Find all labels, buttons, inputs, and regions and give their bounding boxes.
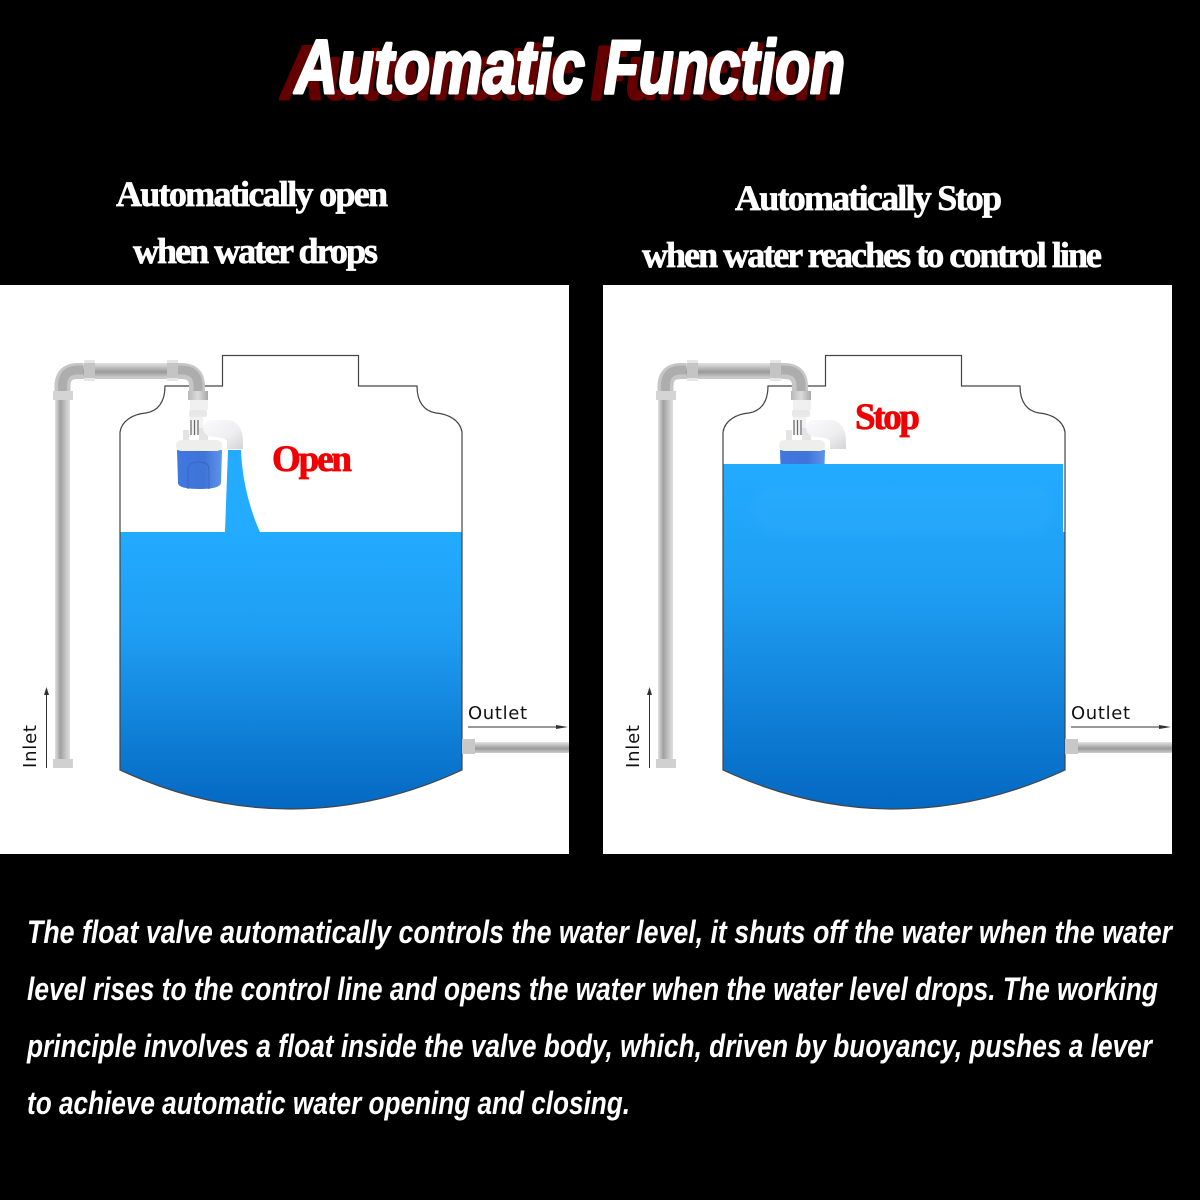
- float valve: [176, 400, 243, 489]
- water in tank: [723, 464, 1065, 809]
- inlet label: Inlet: [20, 725, 41, 768]
- panel: stop state: [603, 285, 1172, 854]
- outlet pipe: [462, 739, 569, 754]
- description text: to achieve automatic water opening and closing.: [27, 1085, 630, 1121]
- tank outline: [120, 356, 462, 809]
- heading: automatically open: Automatically open: [116, 174, 388, 214]
- water highlight patch: [753, 485, 1053, 535]
- title: Function: [591, 31, 831, 116]
- title: Function: [604, 25, 845, 110]
- heading: automatically open: [116, 174, 388, 271]
- water in tank: [120, 532, 462, 809]
- heading: automatically stop: when water reaches to control line: [642, 235, 1102, 275]
- inlet label: [20, 687, 49, 768]
- outlet label: Outlet: [468, 703, 527, 724]
- float valve: [779, 400, 846, 464]
- tank outline: [723, 356, 1065, 809]
- panel: open state: [0, 285, 569, 854]
- inlet pipe: [656, 360, 811, 768]
- label: open: Open: [272, 439, 352, 480]
- outlet label: Outlet: [1071, 703, 1130, 724]
- title: Automatic: [279, 31, 573, 116]
- inlet label: [623, 687, 652, 768]
- title: Automatic: [293, 25, 585, 110]
- heading: automatically open: when water drops: [133, 231, 378, 271]
- title: [279, 25, 845, 116]
- label: stop: Stop: [855, 397, 920, 438]
- heading: automatically stop: Automatically Stop: [735, 178, 1002, 218]
- inlet label: Inlet: [623, 725, 644, 768]
- description text: [26, 914, 1173, 1121]
- inlet pipe: [53, 360, 208, 768]
- heading: automatically stop: [642, 178, 1102, 275]
- outlet label: [1071, 703, 1171, 729]
- outlet pipe: [1065, 739, 1172, 754]
- outlet label: [468, 703, 568, 729]
- waterfall: [225, 450, 260, 532]
